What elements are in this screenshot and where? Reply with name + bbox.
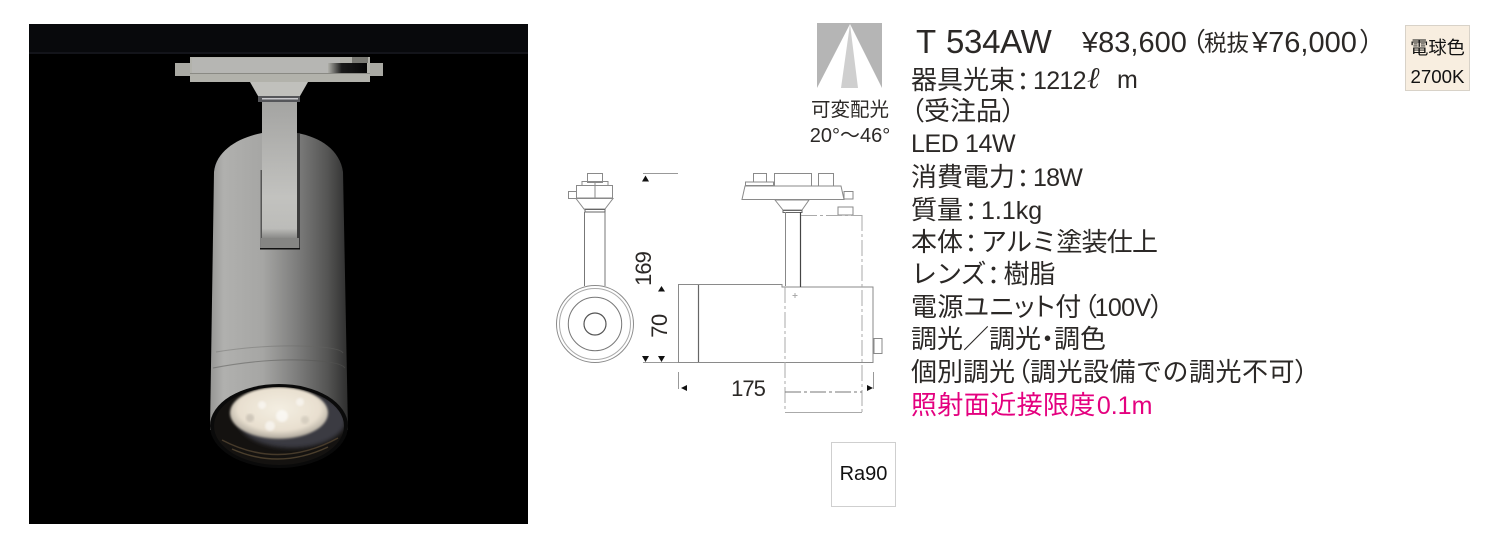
- model number: 534AW: [946, 23, 1052, 60]
- badge: color temperature: [1405, 25, 1470, 91]
- specification list: ：: [964, 197, 978, 227]
- price: ¥76,000: [1252, 27, 1357, 59]
- extension lines: [643, 174, 679, 362]
- price: 税抜: [1204, 31, 1249, 56]
- badge: color temperature: 電球色: [1410, 37, 1465, 58]
- specification list: ：: [964, 229, 978, 259]
- badge: color temperature: 2700K: [1410, 66, 1465, 87]
- specification list: [911, 61, 1308, 420]
- product photo: track spotlight: [29, 24, 528, 524]
- body ring lines: [216, 346, 343, 353]
- specification list: 器具光束 1212: [911, 65, 1086, 95]
- lens opening: [210, 384, 348, 468]
- price: （: [1192, 27, 1205, 57]
- cylinder body: [210, 133, 348, 430]
- adapter: [175, 57, 383, 102]
- dimension arrows: [642, 176, 873, 391]
- price: ¥83,600: [1082, 27, 1187, 59]
- arm: [260, 102, 300, 250]
- label: variable distribution: 可変配光: [811, 99, 889, 121]
- price: [1082, 27, 1373, 59]
- model number: T: [916, 23, 936, 60]
- specification list: LED 14W: [911, 130, 1015, 158]
- specification list: ：: [987, 261, 1000, 291]
- label: variable distribution: [810, 99, 890, 147]
- specification list: ：: [1016, 67, 1030, 97]
- dimension label 169: 169: [631, 252, 656, 286]
- specification list: 本体 アルミ塗装仕上: [911, 227, 1157, 257]
- label: variable distribution: 20°～46°: [810, 125, 890, 147]
- dimension label 175: 175: [731, 376, 765, 401]
- side view: lateral elevation: [678, 174, 882, 412]
- title: model and price: [916, 23, 1373, 60]
- specification list: 照射面近接限度0.1m: [911, 390, 1152, 420]
- specification list: ：: [1016, 164, 1030, 194]
- specification list: 個別調光（調光設備での調光不可）: [911, 357, 1308, 387]
- specification list: m: [1117, 66, 1138, 94]
- icon: variable light distribution: [817, 23, 882, 88]
- specification list: 調光／調光・調色: [911, 324, 1106, 354]
- specification list: （受注品）: [911, 96, 1015, 126]
- specification list: 質量 1.1kg: [911, 195, 1042, 225]
- specification list: ℓ: [1087, 61, 1100, 96]
- badge: Ra90: [831, 442, 896, 507]
- specification list: 消費電力 18W: [911, 162, 1082, 192]
- specification list: 電源ユニット付（100V）: [911, 292, 1163, 322]
- dimension label 70: 70: [647, 314, 672, 338]
- price: ）: [1360, 27, 1373, 57]
- specification list: レンズ 樹脂: [911, 259, 1056, 289]
- side view: front elevation: [556, 174, 634, 362]
- badge: Ra90: Ra90: [840, 463, 887, 485]
